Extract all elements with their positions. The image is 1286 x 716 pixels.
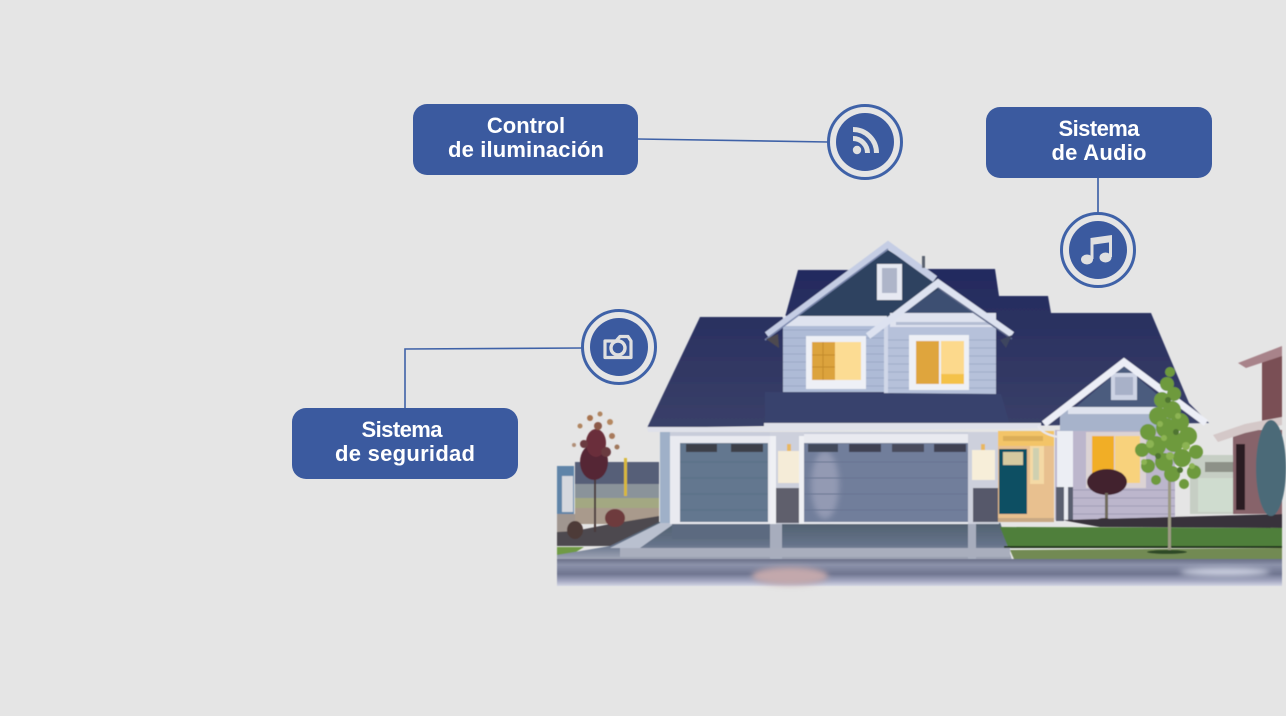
lower roof band [765,392,1009,423]
left tree [567,412,625,539]
mulch [1062,514,1282,528]
icon: music note [1062,214,1134,286]
driveway [557,522,1012,560]
house photo illustration [557,245,1286,586]
right background [1190,455,1236,514]
label: Control de iluminación [413,104,638,175]
dormer vent [877,264,902,300]
bush [1087,469,1127,524]
left pillar [770,432,804,524]
connector: Sistema de seguridad to icon [405,348,582,408]
lawn [1000,527,1282,559]
left garage door [670,436,774,524]
upper walls [783,322,884,392]
second gable triangle [892,290,990,314]
garage wall [660,432,1000,523]
connector: Sistema de Audio to icon [1097,178,1099,213]
label: Sistema de Audio: de Audio [1052,140,1146,165]
right garage door [794,434,975,524]
label: Sistema de Audio [986,107,1212,178]
second gable trim [868,283,1012,336]
roof [647,269,1209,428]
label: Sistema de seguridad: Sistema [362,417,443,442]
fascia [647,423,1041,432]
neighbouring house [1213,346,1286,516]
upper gable wall [785,250,945,322]
label: Sistema de Audio: Sistema [1058,116,1140,141]
icon: wifi signal [828,106,902,178]
road [557,559,1282,586]
right pillar [968,432,999,524]
connector: Control de iluminación to icon [638,139,828,142]
right tree [1135,367,1203,554]
entry [998,431,1054,522]
porch [1038,362,1206,521]
label: Sistema de seguridad [292,408,518,479]
main gable trim [767,245,935,335]
label: Sistema de seguridad: de seguridad [335,441,475,466]
upper left window [806,336,866,389]
icon: camera [582,310,656,384]
label: Control de iluminación: Control [487,113,565,138]
label: Control de iluminación: de iluminación [448,137,604,162]
upper right window [909,335,969,390]
left yard background [557,458,659,556]
